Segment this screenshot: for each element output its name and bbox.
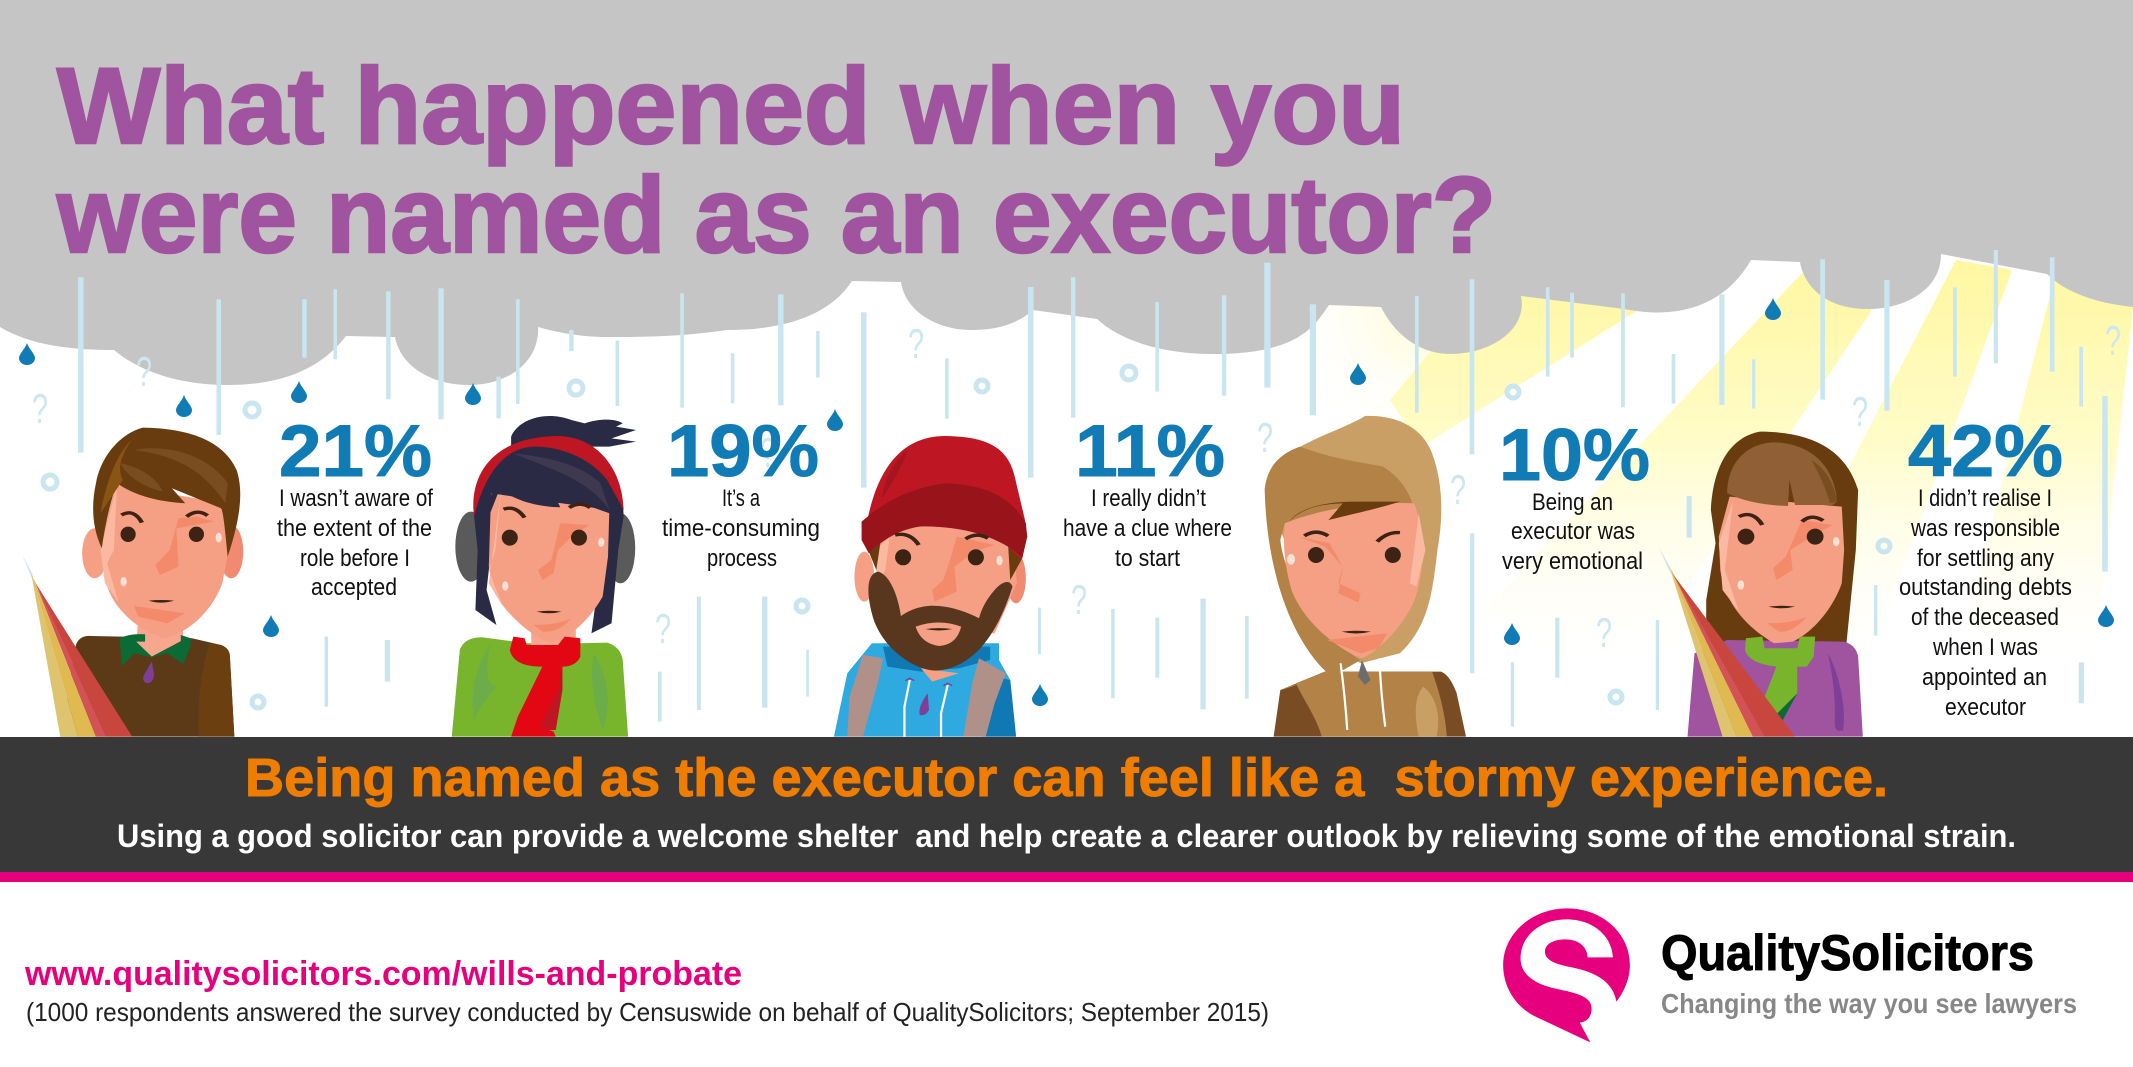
stat: 21%: role before I: [300, 545, 410, 572]
character 1: man with brown hair and umbrella: [22, 428, 243, 737]
stat: 19%: [662, 411, 820, 572]
floating question marks: ?: [1071, 576, 1087, 623]
logo wordmark and tagline: Changing the way you see lawyers: [1661, 988, 2077, 1019]
stat: 42%: executor: [1945, 694, 2026, 721]
floating question marks: ?: [2105, 317, 2121, 364]
title: [56, 45, 1496, 275]
storm cloud: [0, 0, 2133, 385]
stat: 42%: when I was: [1932, 634, 2038, 661]
rain middle section: [731, 263, 1316, 709]
character 2: woman with headband, earmuffs and red scarf: [452, 416, 636, 737]
stat: 19%: time-consuming: [662, 515, 820, 542]
dark message band: Being named as the executor can feel like a stormy experience.: [245, 748, 1888, 808]
stat: 21%: 21%: [279, 411, 432, 492]
stat: 11%: [1063, 411, 1232, 572]
stat: 21%: [277, 411, 433, 601]
floating question marks: ?: [760, 429, 776, 476]
stat: 11%: I really didn’t: [1091, 485, 1206, 512]
stat: 42%: [1899, 411, 2072, 721]
stat: 42%: for settling any: [1917, 545, 2054, 572]
title: What happened when you: [57, 45, 1405, 166]
rain left section: [78, 277, 701, 722]
floating question marks: ?: [136, 348, 152, 395]
stat: 10%: [1499, 415, 1650, 575]
character 3: bearded man with red beanie and backpack: [834, 436, 1027, 737]
character 5: woman with long brown hair, green scarf and umbrella: [1659, 432, 1863, 737]
floating question marks: ?: [1257, 414, 1273, 461]
floating question marks: ?: [655, 605, 671, 652]
stat: 21%: accepted: [311, 574, 397, 601]
stat: 11%: have a clue where: [1063, 515, 1232, 542]
stat: 42%: I didn’t realise I: [1918, 485, 2052, 512]
stat: 42%: was responsible: [1910, 515, 2060, 542]
floating question marks: ?: [1596, 609, 1612, 656]
stat: 21%: the extent of the: [277, 515, 432, 542]
dark message band: [0, 737, 2133, 882]
floating circles: [43, 366, 1890, 708]
stat: 42%: of the deceased: [1911, 604, 2059, 631]
website link and survey source: (1000 respondents answered the survey conducted by Censuswide on behalf of QualitySolicitors; September 2015): [26, 997, 1269, 1027]
stat: 19%: 19%: [667, 411, 819, 492]
dark message band: Using a good solicitor can provide a welcome shelter and help create a clearer outlook by relieving some of the emotional strain.: [117, 818, 2016, 854]
stat: 10%: very emotional: [1502, 548, 1643, 575]
stat: 11%: to start: [1115, 545, 1180, 572]
rain right section: [1415, 250, 2108, 727]
sunbeams: [1290, 260, 2133, 720]
floating question marks: [32, 317, 2121, 656]
character 4: person in tan hooded coat: [1265, 416, 1466, 737]
logo: speech bubble S: [1503, 908, 1630, 1042]
stat: 10%: 10%: [1499, 415, 1650, 496]
logo wordmark and tagline: [1661, 925, 2077, 1019]
stat: 10%: executor was: [1511, 518, 1635, 545]
stat: 42%: 42%: [1908, 411, 2063, 492]
floating question marks: ?: [1450, 466, 1466, 513]
website link and survey source: [24, 955, 1269, 1027]
logo wordmark and tagline: QualitySolicitors: [1661, 925, 2034, 981]
floating question marks: ?: [32, 385, 48, 432]
stat: 11%: 11%: [1075, 411, 1225, 492]
title: were named as an executor?: [56, 154, 1496, 275]
website link and survey source: www.qualitysolicitors.com/wills-and-probate: [24, 955, 742, 993]
stat: 19%: process: [707, 545, 777, 572]
stat: 42%: appointed an: [1922, 664, 2047, 691]
stat: 10%: Being an: [1532, 489, 1613, 516]
stat: 21%: I wasn’t aware of: [279, 485, 433, 512]
floating question marks: ?: [1852, 388, 1868, 435]
blue rain drops: [19, 298, 2114, 706]
stat: 19%: It’s a: [722, 485, 760, 512]
stat: 42%: outstanding debts: [1899, 574, 2072, 601]
floating question marks: ?: [908, 320, 924, 367]
